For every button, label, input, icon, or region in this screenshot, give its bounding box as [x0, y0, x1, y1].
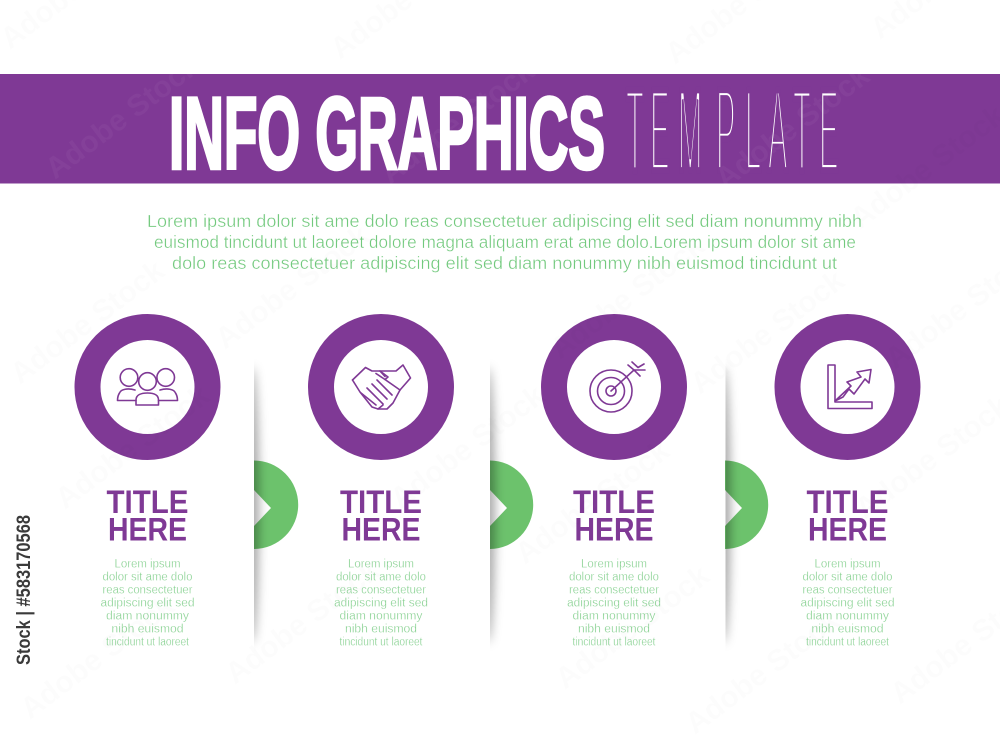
heading 1: TITLE	[106, 484, 188, 520]
body text 4: tincidunt ut laoreet	[806, 636, 890, 648]
body text 4: dolor sit ame dolo	[802, 572, 892, 584]
body text 2: dolor sit ame dolo	[336, 572, 426, 584]
watermark: Adobe Stock	[219, 554, 386, 691]
body text 4: adipiscing elit sed	[800, 598, 894, 610]
body text 3	[567, 558, 661, 648]
intro paragraph	[147, 211, 862, 273]
title banner	[0, 66, 1000, 197]
body text 1: dolor sit ame dolo	[102, 572, 192, 584]
body text 2: tincidunt ut laoreet	[340, 636, 423, 648]
panel: step 3: HERE	[574, 512, 654, 548]
body text 2: nibh euismod	[345, 624, 417, 636]
watermark: Adobe Stock	[549, 559, 716, 696]
watermark: Adobe Stock	[39, 49, 206, 186]
panel: step 1	[88, 327, 208, 648]
body text 3: dolor sit ame dolo	[569, 572, 659, 584]
body text 2: Lorem ipsum	[348, 558, 414, 570]
watermark: Adobe Stock	[679, 604, 846, 741]
body text 3: adipiscing elit sed	[567, 598, 661, 610]
watermark: Adobe Stock	[4, 254, 171, 391]
arrow connector 1	[254, 366, 298, 644]
panel: step 2: HERE	[342, 512, 420, 548]
body text 4: reas consectetuer	[802, 584, 893, 596]
body text 2: diam nonummy	[340, 610, 423, 622]
body text 1: tincidunt ut laoreet	[106, 636, 190, 648]
panel: step 4	[788, 327, 908, 648]
body text 1: nibh euismod	[112, 624, 184, 636]
icon: target	[590, 362, 645, 412]
watermark: Adobe Stock	[544, 229, 711, 366]
body text 1	[100, 558, 194, 648]
icon: growth chart	[828, 365, 872, 408]
body text 1: Lorem ipsum	[114, 558, 180, 570]
watermark: Adobe Stock	[49, 379, 216, 516]
heading 4: TITLE	[806, 484, 888, 520]
intro paragraph: euismod tincidunt ut laoreet dolore magna aliquam erat ame dolo.Lorem ipsum dolor sit ame	[154, 232, 856, 252]
watermark: Adobe Stock	[384, 379, 551, 516]
watermark: Adobe Stock	[509, 434, 676, 571]
body text 3: Lorem ipsum	[581, 558, 647, 570]
icon: people	[118, 369, 178, 405]
body text 2: adipiscing elit sed	[334, 598, 428, 610]
intro paragraph: dolo reas consectetuer adipiscing elit sed diam nonummy nibh euismod tincidunt ut	[172, 253, 837, 273]
icon: handshake	[352, 365, 410, 409]
heading 3: TITLE	[573, 484, 655, 520]
icon ring 3	[554, 327, 674, 447]
body text 3: tincidunt ut laoreet	[572, 636, 656, 648]
body text 3: diam nonummy	[572, 610, 656, 622]
heading 2: TITLE	[340, 484, 422, 520]
stock id side label: Stock | #583170568	[14, 515, 35, 665]
body text 4	[800, 558, 894, 648]
body text 4: diam nonummy	[806, 610, 889, 622]
body text 4: nibh euismod	[812, 624, 884, 636]
body text 1: reas consectetuer	[102, 584, 193, 596]
title: bold part: INFO GRAPHICS	[169, 76, 605, 190]
icon ring 1	[88, 327, 208, 447]
body text 1: diam nonummy	[106, 610, 189, 622]
arrow connector 3	[725, 366, 768, 644]
panel: step 2	[321, 327, 441, 648]
body text 3: nibh euismod	[578, 624, 650, 636]
panel: step 1: HERE	[108, 512, 187, 548]
title: thin part: TEMPLATE	[626, 66, 839, 197]
body text 4: Lorem ipsum	[814, 558, 880, 570]
icon ring 2	[321, 327, 441, 447]
body text 2: reas consectetuer	[336, 584, 426, 596]
watermark: Adobe Stock	[14, 589, 181, 726]
icon ring 4	[788, 327, 908, 447]
body text 2	[334, 558, 428, 648]
arrow connector 2	[490, 366, 534, 644]
body text 1: adipiscing elit sed	[100, 598, 194, 610]
panel: step 3	[554, 327, 674, 648]
watermark: Adobe Stock	[374, 54, 541, 191]
panel: step 4: HERE	[808, 512, 887, 548]
intro paragraph: Lorem ipsum dolor sit ame dolo reas consectetuer adipiscing elit sed diam nonummy nibh	[147, 211, 862, 231]
watermark: Adobe Stock	[209, 219, 376, 356]
watermark: Adobe Stock	[684, 264, 851, 401]
watermark: Adobe Stock	[709, 59, 876, 196]
body text 3: reas consectetuer	[569, 584, 659, 596]
